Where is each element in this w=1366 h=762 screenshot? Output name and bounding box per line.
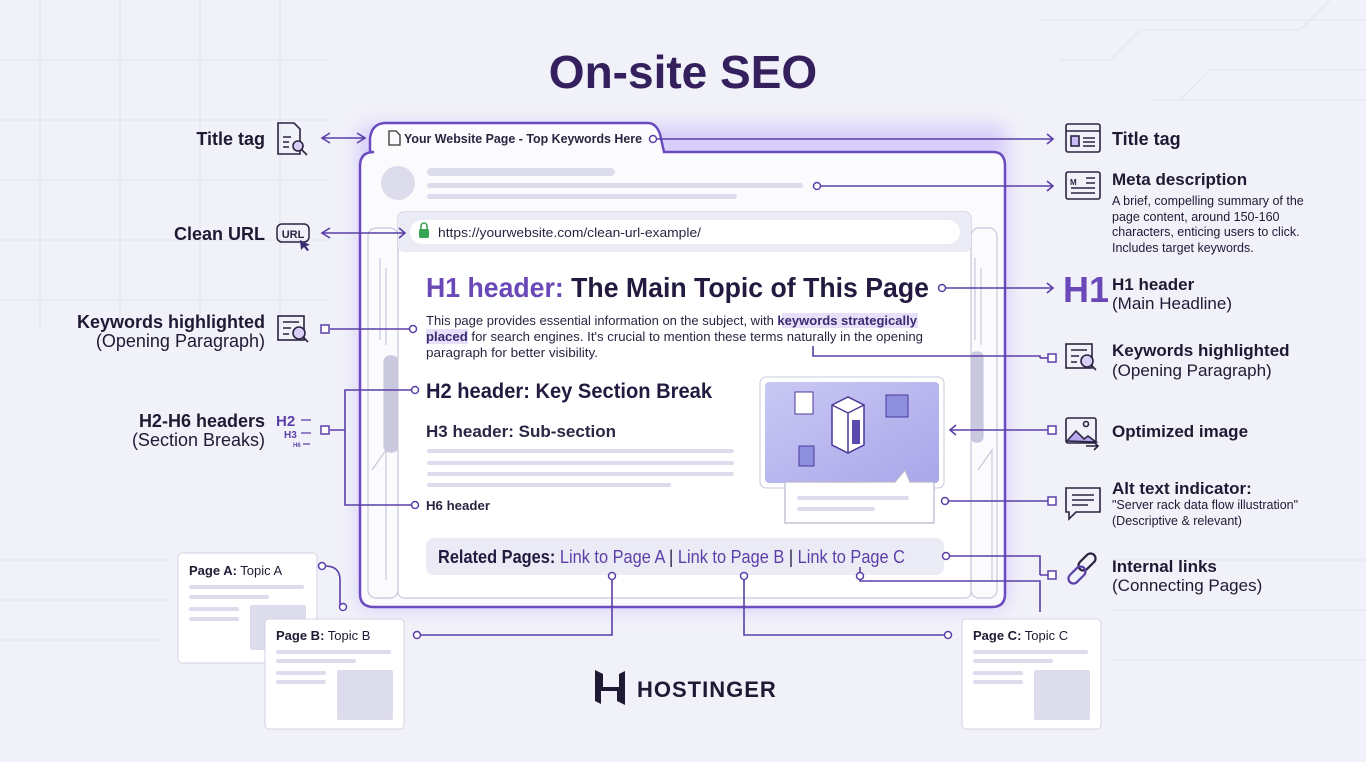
- tab title: Your Website Page - Top Keywords Here: [404, 131, 642, 146]
- browser frame: [358, 123, 1008, 609]
- paragraph: This page provides essential information on the subject, with keywords strategically: [426, 314, 917, 328]
- right label: optimized image: Optimized image: [1112, 422, 1248, 441]
- right label: internal links: Internal links: [1112, 557, 1217, 576]
- left label: keywords: (Opening Paragraph): [96, 331, 265, 351]
- connector lines: [322, 133, 1053, 635]
- right label: internal links: (Connecting Pages): [1112, 576, 1262, 595]
- left label: h2-h6: H2-H6 headers: [139, 411, 265, 431]
- icon: h levels: H3: [284, 430, 297, 441]
- skeleton header: [381, 166, 803, 200]
- right label: alt text: Alt text indicator:: [1112, 479, 1252, 498]
- right label: optimized image: [1066, 418, 1248, 450]
- right label: keywords: (Opening Paragraph): [1112, 361, 1272, 380]
- right label: keywords: [1066, 341, 1290, 380]
- side decorations: [368, 228, 997, 598]
- right label: title tag: [1066, 124, 1181, 152]
- icon: url: URL: [282, 229, 305, 241]
- h1: H1 header: The Main Topic of This Page: [426, 272, 929, 303]
- right label: meta description: Includes target keywords.: [1112, 241, 1254, 255]
- left label: keywords: Keywords highlighted: [77, 312, 265, 332]
- title: On-site SEO: [549, 46, 817, 98]
- inner page: [398, 212, 971, 598]
- paragraph: [426, 313, 923, 360]
- icon: h levels: H6: [293, 443, 301, 449]
- right label: h1: H1 header: [1112, 275, 1195, 294]
- right label: alt text: [1066, 479, 1298, 528]
- left label: title tag: Title tag: [196, 129, 265, 149]
- right label: meta description: page content, around 150-160: [1112, 210, 1280, 224]
- left label: h2-h6: [132, 411, 311, 450]
- right label: keywords: Keywords highlighted: [1112, 341, 1290, 360]
- left label: title tag: [196, 123, 307, 155]
- page card B: [265, 619, 404, 729]
- right label: internal links: [1066, 551, 1262, 595]
- icon: keyword doc: [278, 316, 308, 342]
- page card B: Page B: Topic B: [276, 628, 370, 643]
- left label: clean url: Clean URL: [174, 224, 265, 244]
- right label: meta description: A brief, compelling summary of the: [1112, 194, 1304, 208]
- right label: meta description: characters, enticing users to click.: [1112, 225, 1300, 239]
- icon: h levels: [276, 413, 311, 449]
- related pages: Related Pages: Link to Page A | Link to Page B | Link to Page C: [438, 547, 905, 567]
- right label: h1: (Main Headline): [1112, 294, 1232, 313]
- page card A: Page A: Topic A: [189, 563, 283, 578]
- right label: alt text: (Descriptive & relevant): [1112, 514, 1242, 528]
- icon: h levels: H2: [276, 413, 295, 430]
- right label: alt text: "Server rack data flow illustration": [1112, 498, 1298, 512]
- page card A: [178, 553, 317, 663]
- left label: h2-h6: (Section Breaks): [132, 430, 265, 450]
- left label: clean url: [174, 224, 310, 251]
- right label: h1: H1: [1063, 269, 1109, 310]
- h3: H3 header: Sub-section: [426, 422, 616, 441]
- page card C: Page C: Topic C: [973, 628, 1068, 643]
- right label: meta description: M: [1070, 178, 1077, 187]
- h2: H2 header: Key Section Break: [426, 380, 712, 403]
- logo: hostinger: [595, 670, 777, 705]
- paragraph: paragraph for better visibility.: [426, 346, 598, 360]
- alt text callout: [785, 470, 934, 523]
- h6: H6 header: [426, 499, 490, 513]
- logo: hostinger: HOSTINGER: [637, 677, 777, 702]
- url bar: https://yourwebsite.com/clean-url-example/: [438, 225, 701, 240]
- right label: meta description: Meta description: [1112, 170, 1247, 189]
- paragraph: placed for search engines. It's crucial to mention these terms naturally in the opening: [426, 330, 923, 344]
- page card C: [962, 619, 1101, 729]
- icon: document search: [278, 123, 307, 155]
- right label: meta description: [1066, 170, 1304, 255]
- left label: keywords: [77, 312, 308, 351]
- image: [760, 377, 944, 488]
- related pages: [426, 538, 944, 575]
- right label: title tag: Title tag: [1112, 129, 1181, 149]
- right label: h1: [1063, 269, 1232, 313]
- url bar: [410, 220, 960, 244]
